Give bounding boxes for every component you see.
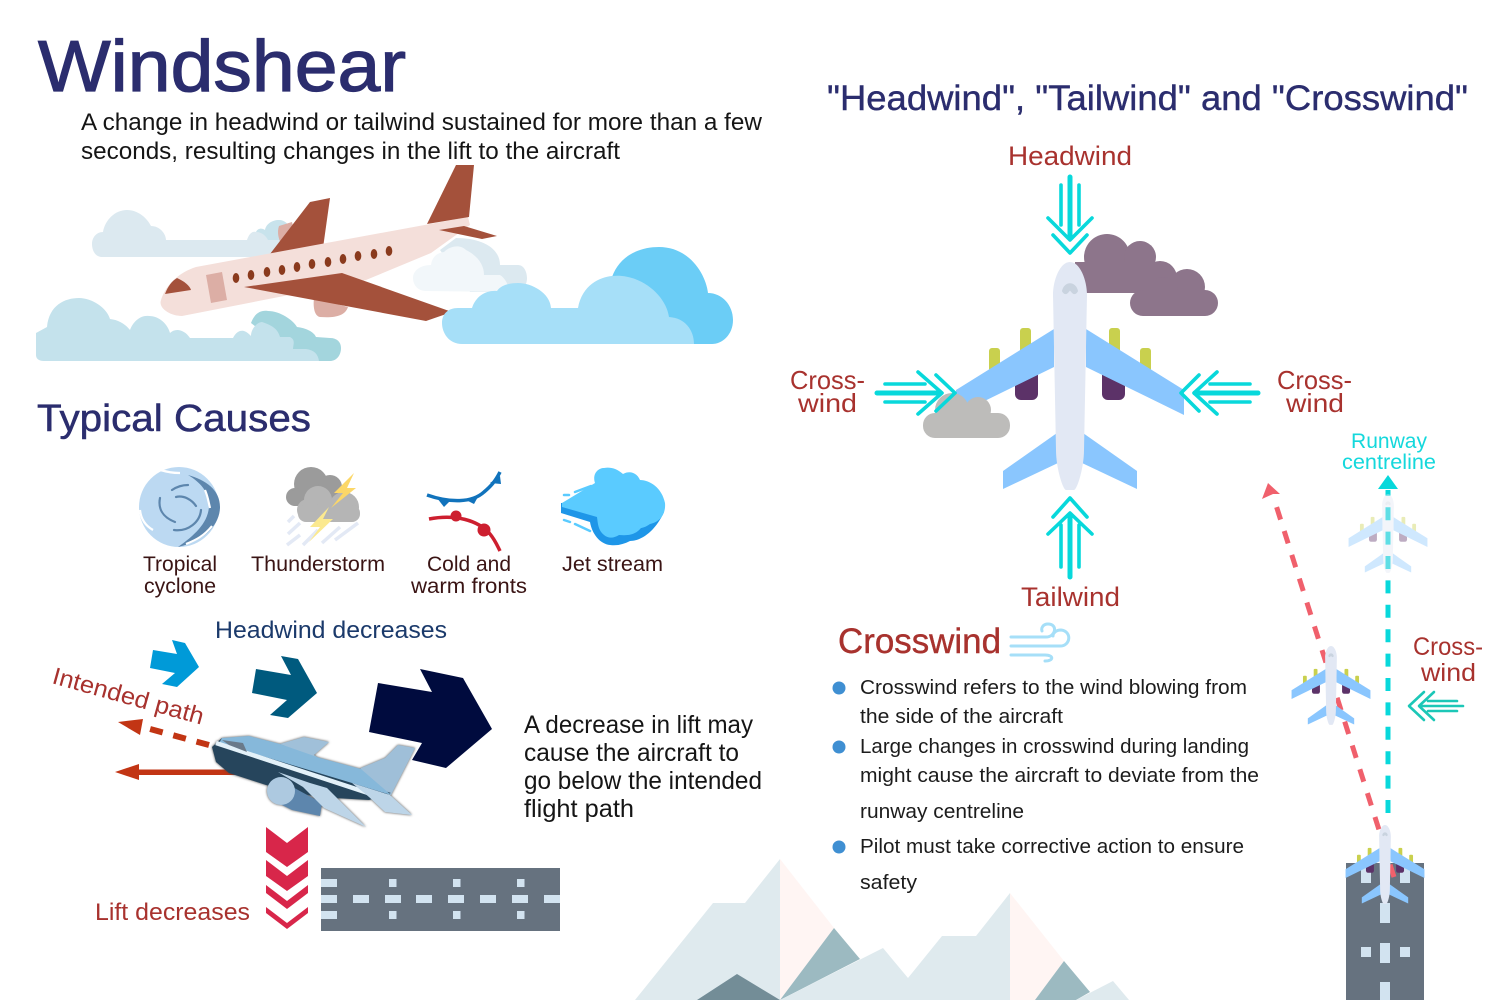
arrow: intended path [118, 719, 209, 745]
description: decrease in lift: A decrease in lift may [524, 711, 753, 739]
label: headwind: Headwind [1008, 141, 1132, 171]
cloud: behind tail [413, 238, 527, 292]
label: crosswind left [790, 365, 865, 418]
arrow: headwind [1048, 177, 1092, 253]
label: runway centreline [1342, 430, 1436, 474]
icon: thunderstorm [286, 467, 360, 545]
cause: thunderstorm [251, 467, 385, 576]
arrow: crosswind small [1409, 692, 1463, 720]
description: decrease in lift [524, 711, 762, 823]
label: cold and warm fronts [410, 553, 527, 598]
bullet list: crosswind facts: safety [860, 872, 917, 894]
heading: headwind, tailwind and crosswind: "Headwind", "Tailwind" and "Crosswind" [827, 79, 1468, 118]
arrow: crosswind from left [877, 372, 955, 414]
bullet list: crosswind facts [832, 677, 1259, 894]
label: cold and warm fronts: Cold and [427, 553, 511, 576]
label: jet stream: Jet stream [562, 553, 663, 576]
cloud: grey [923, 393, 1010, 438]
bullet list: crosswind facts: Large changes in crosswind during landing [860, 736, 1249, 758]
cloud: upper left [92, 210, 292, 257]
heading: crosswind: Crosswind [838, 622, 1001, 661]
illustration: descending jet [212, 736, 415, 827]
arrow: tailwind [1048, 498, 1092, 577]
label: runway centreline: centreline [1342, 451, 1436, 474]
label: crosswind right [1277, 365, 1352, 418]
bullet list: crosswind facts: the side of the aircraft [860, 706, 1063, 728]
definition text: A change in headwind or tailwind sustained for more than a few [81, 109, 763, 136]
icon: weather fronts [427, 472, 501, 551]
cause: cold and warm fronts [410, 472, 527, 598]
runway: horizontal [321, 868, 560, 931]
arrow: crosswind from right [1181, 372, 1258, 414]
cloud: lower left [36, 298, 341, 361]
definition text: seconds, resulting changes in the lift to the aircraft [81, 138, 620, 165]
label: crosswind left: wind [797, 388, 857, 418]
aeroplane: at runway [1346, 825, 1424, 904]
fuselage [161, 217, 470, 316]
arrow: lift chevrons [266, 827, 308, 929]
arrow: medium headwind [252, 656, 317, 718]
label: tailwind: Tailwind [1021, 582, 1120, 612]
label: tropical cyclone [143, 553, 217, 598]
runway: vertical [1346, 863, 1424, 1000]
bullet list: crosswind facts: Pilot must take corrective action to ensure [860, 836, 1244, 858]
icon: cyclone [139, 467, 220, 547]
icon: wind [1011, 624, 1069, 661]
title: Windshear [38, 27, 406, 107]
heading: typical causes: Typical Causes [37, 398, 311, 440]
bullet list: crosswind facts: Crosswind refers to the wind blowing from [860, 677, 1247, 699]
arrow: deviated track [1262, 483, 1394, 877]
arrow: strong headwind [369, 669, 492, 768]
tail and near wing [244, 165, 497, 321]
description: decrease in lift: go below the intended [524, 767, 762, 795]
cloud: right [442, 247, 733, 344]
label: crosswind left: Cross- [790, 365, 865, 395]
label: cold and warm fronts: warm fronts [410, 575, 527, 598]
label: tropical cyclone: cyclone [144, 575, 216, 598]
arrow: light headwind [150, 640, 199, 687]
label: intended path: Intended path [49, 663, 207, 730]
clouds: purple [1075, 234, 1218, 316]
label: lift decreases: Lift decreases [95, 899, 250, 926]
bullet list: crosswind facts: runway centreline [860, 801, 1024, 823]
illustration: aeroplane among clouds [36, 165, 733, 361]
description: decrease in lift: cause the aircraft to [524, 739, 739, 767]
far wing and engine [270, 198, 348, 317]
label: thunderstorm: Thunderstorm [251, 553, 385, 576]
aeroplane: top view [956, 262, 1184, 490]
label: crosswind small: wind [1420, 659, 1476, 687]
arrow: actual path [115, 764, 235, 780]
cockpit and door [165, 272, 227, 303]
icon: jet stream [561, 468, 665, 545]
definition text [81, 109, 763, 165]
label: crosswind small: Cross- [1413, 633, 1483, 661]
cause: tropical cyclone [139, 467, 220, 598]
label: crosswind right: wind [1285, 388, 1344, 418]
cause: jet stream [561, 468, 665, 576]
label: crosswind right: Cross- [1277, 365, 1352, 395]
description: decrease in lift: flight path [524, 795, 634, 823]
bullet list: crosswind facts: might cause the aircraft to deviate from the [860, 765, 1259, 787]
aeroplane: target position [1349, 494, 1427, 573]
label: tropical cyclone: Tropical [143, 553, 217, 576]
label: headwind decreases: Headwind decreases [215, 617, 447, 644]
aeroplane: drifted position [1292, 646, 1370, 725]
arrow: runway centreline [1378, 475, 1398, 813]
label: crosswind small [1413, 633, 1483, 687]
label: runway centreline: Runway [1351, 430, 1427, 453]
illustration: mountains [635, 859, 1129, 1000]
cabin windows [233, 246, 392, 283]
